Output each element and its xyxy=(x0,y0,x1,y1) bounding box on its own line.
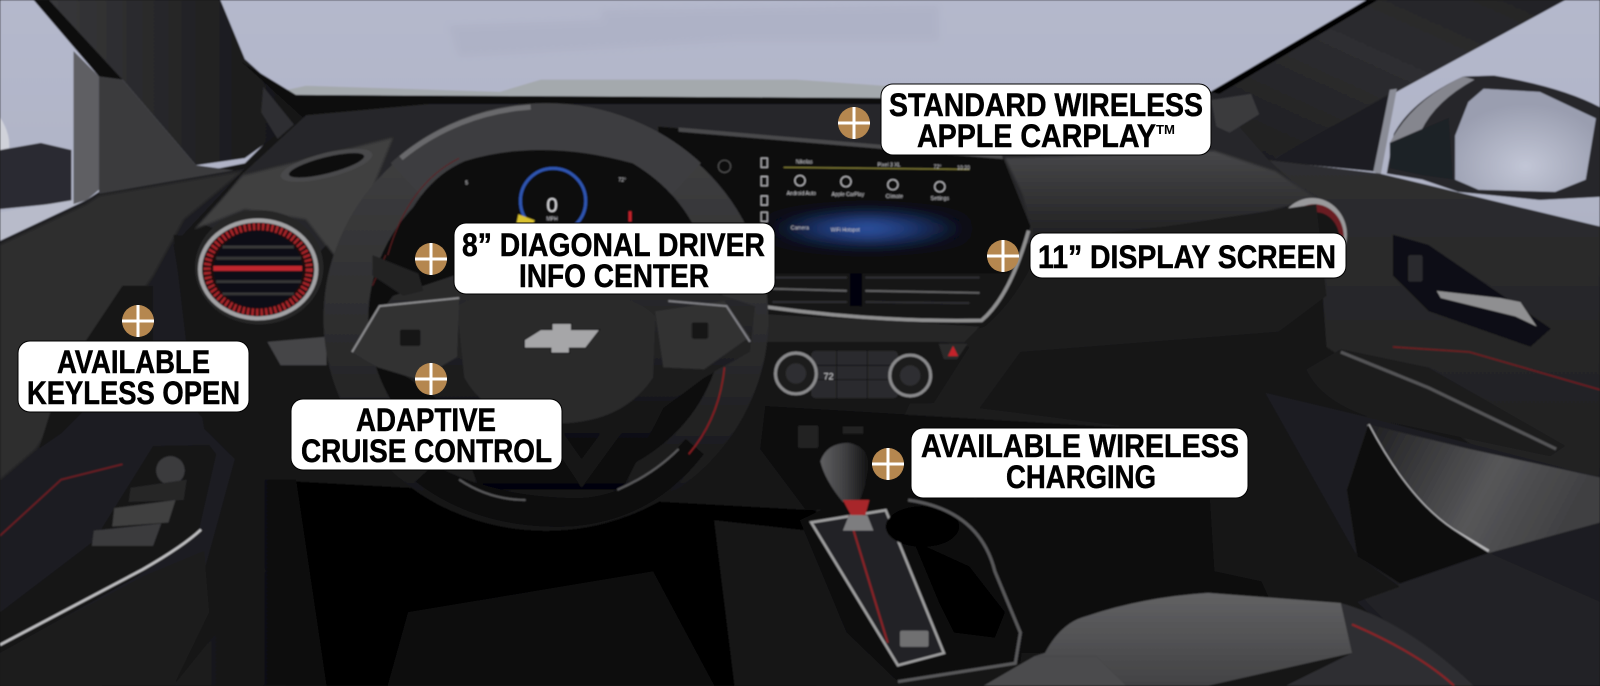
right lower door area xyxy=(1265,393,1600,686)
screen labels xyxy=(787,159,970,234)
callout: driver info center: 8” DIAGONAL DRIVER xyxy=(462,227,765,263)
door stitching xyxy=(0,464,122,536)
left spoke controls xyxy=(352,298,459,380)
dashboard top xyxy=(204,94,1316,265)
callout: adaptive cruise control: ADAPTIVE xyxy=(356,402,496,438)
callout: available wireless charging: AVAILABLE WIRELESS xyxy=(921,428,1239,464)
screen labels: Camera xyxy=(791,226,809,232)
callout: driver info center xyxy=(454,223,775,294)
callout: keyless open: AVAILABLE xyxy=(57,344,210,380)
glove box recess xyxy=(980,332,1281,429)
callout: display screen: 11” DISPLAY SCREEN xyxy=(1038,239,1336,275)
shifter xyxy=(820,443,873,531)
door red stitching xyxy=(1393,347,1600,390)
silver door line xyxy=(0,530,201,645)
marker: adaptive cruise control xyxy=(415,363,447,395)
callout: available wireless charging: CHARGING xyxy=(1006,459,1156,495)
door silver line xyxy=(1368,424,1489,551)
airbag xyxy=(457,291,655,423)
usb area xyxy=(798,426,863,448)
wheel hub xyxy=(352,276,755,490)
right air vent xyxy=(1278,198,1347,271)
door grey panel xyxy=(1368,424,1600,553)
marker: keyless open xyxy=(122,305,154,337)
callout: driver info center: INFO CENTER xyxy=(519,258,709,294)
gauge xyxy=(465,168,632,234)
wheel interior xyxy=(362,145,730,492)
left door cap highlight xyxy=(0,171,242,480)
screen labels: 72° xyxy=(934,164,941,170)
center vents below screen xyxy=(714,273,1005,311)
door handle xyxy=(1393,235,1551,347)
gauge: MPH xyxy=(546,216,558,222)
climate panel xyxy=(767,343,969,406)
cup holders xyxy=(886,506,959,547)
keyless handle recess xyxy=(39,286,153,449)
lower wheel gloss xyxy=(415,439,704,527)
window switch pod xyxy=(0,445,216,653)
screen labels: Pixel 3 XL xyxy=(878,162,901,168)
gauge: 72° xyxy=(618,178,626,184)
right door armrest xyxy=(1306,349,1565,456)
screen status bar xyxy=(784,167,969,169)
left footwell trim xyxy=(173,480,327,686)
left dash textured panel xyxy=(194,138,393,265)
screen xyxy=(658,127,1031,273)
callout: standard wireless apple carplay: APPLE CARPLAY xyxy=(917,118,1156,154)
steering wheel xyxy=(346,107,755,527)
below screen fascia xyxy=(714,311,980,342)
windshield reflection xyxy=(449,5,939,56)
callout: standard wireless apple carplay: STANDARD WIRELESS xyxy=(889,87,1203,123)
door pocket xyxy=(1347,424,1489,584)
lower spokes xyxy=(546,418,624,488)
floor xyxy=(265,480,816,686)
right side mirror xyxy=(1387,76,1600,200)
screen labels: Climate xyxy=(886,194,903,200)
center under-dash dark area xyxy=(760,406,1143,510)
right footwell panel xyxy=(1204,393,1400,602)
screen glow xyxy=(765,210,969,247)
callout: keyless open: KEYLESS OPEN xyxy=(27,375,240,411)
left lower dash xyxy=(173,235,347,449)
hazard button xyxy=(939,344,967,359)
right footwell xyxy=(963,480,1276,653)
left side window detail xyxy=(0,117,87,241)
right door top xyxy=(1269,160,1600,531)
callout: adaptive cruise control: CRUISE CONTROL xyxy=(301,433,552,469)
marker: display screen xyxy=(987,240,1019,272)
callout: standard wireless apple carplay: TM xyxy=(1156,122,1175,137)
screen labels: Android Auto xyxy=(787,191,816,197)
seat xyxy=(984,593,1473,686)
right dash textured panel xyxy=(1005,151,1316,243)
screen labels: Nikolas xyxy=(796,159,813,165)
bowtie logo xyxy=(524,323,600,353)
windshield base edge xyxy=(241,61,898,120)
screen labels: WiFi Hotspot xyxy=(831,228,860,234)
red vent slat xyxy=(213,266,302,271)
screen labels: Settings xyxy=(931,196,949,202)
stalk xyxy=(372,255,423,296)
right A pillar xyxy=(1210,0,1565,176)
silver trim xyxy=(767,231,1029,321)
left door xyxy=(0,168,245,686)
callout: standard wireless apple carplay xyxy=(881,84,1211,155)
marker: driver info center xyxy=(415,243,447,275)
center tunnel side xyxy=(714,520,867,686)
callout: keyless open xyxy=(18,341,249,412)
left A pillar xyxy=(34,0,306,204)
lower left door xyxy=(0,551,209,686)
left air vent xyxy=(195,210,323,324)
screen icons xyxy=(718,158,945,221)
lower dash right xyxy=(898,204,1327,429)
windshield and windows sky xyxy=(0,0,1600,265)
lower door xyxy=(1357,553,1600,686)
top air vent xyxy=(278,142,375,189)
dash switch xyxy=(267,337,327,365)
wheel rim xyxy=(346,129,746,508)
marker: wireless charging xyxy=(872,448,904,480)
callout: available wireless charging xyxy=(911,428,1248,498)
callout: adaptive cruise control xyxy=(291,399,562,470)
gauge: 0 xyxy=(546,195,558,217)
screen labels: Apple CarPlay xyxy=(832,192,865,198)
screen labels: 10:20 xyxy=(957,165,970,171)
red stitch xyxy=(689,367,724,454)
center console xyxy=(800,488,1023,682)
climate panel: 72 xyxy=(823,372,834,382)
driver cluster xyxy=(393,150,702,296)
marker: apple carplay xyxy=(838,107,870,139)
right spoke controls xyxy=(655,301,750,369)
gauge: 5 xyxy=(465,181,468,187)
carpet xyxy=(388,571,714,686)
